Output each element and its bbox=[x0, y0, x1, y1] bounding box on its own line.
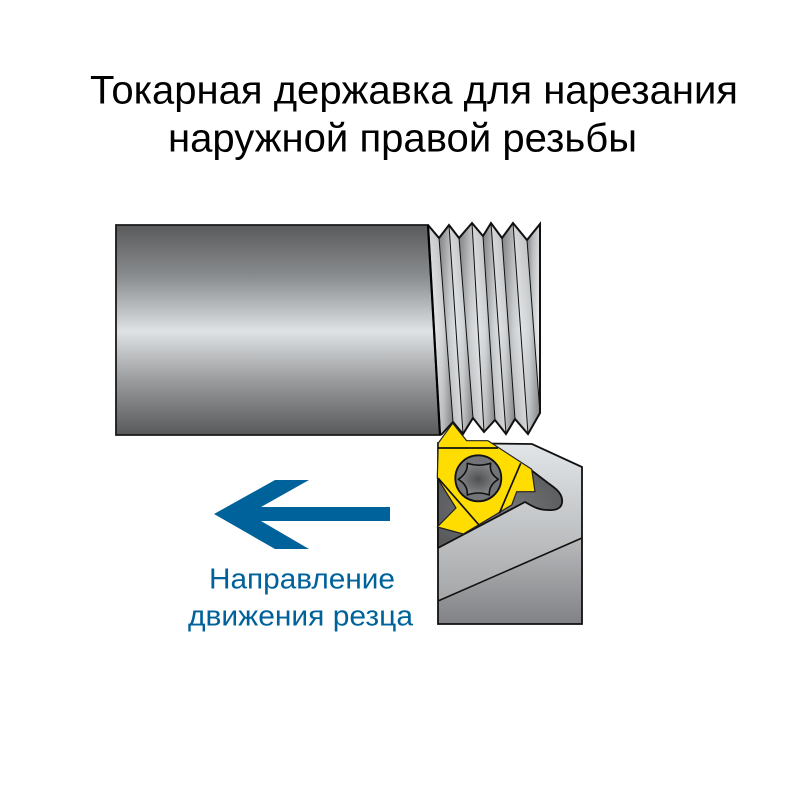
holder lower line bbox=[438, 538, 582, 601]
thread root lines bbox=[439, 223, 540, 434]
torx socket bbox=[458, 463, 498, 495]
holder upper body bbox=[438, 443, 582, 601]
direction label: Направление bbox=[209, 564, 395, 596]
cylinder shank bbox=[116, 225, 440, 435]
title: Токарная державка для нарезания bbox=[90, 68, 738, 112]
title bbox=[90, 68, 738, 160]
thread flanks bbox=[428, 223, 540, 435]
insert edge lines bbox=[438, 448, 521, 525]
holder lower body bbox=[438, 538, 582, 624]
threading insert bbox=[437, 423, 535, 534]
direction arrow bbox=[214, 480, 390, 549]
shank thread edge bbox=[428, 225, 440, 435]
threaded workpiece bbox=[428, 223, 540, 435]
screw bbox=[455, 455, 501, 501]
title: наружной правой резьбы bbox=[168, 116, 637, 160]
direction label bbox=[188, 564, 414, 632]
thread outline bbox=[428, 223, 540, 435]
tool holder bbox=[437, 423, 582, 624]
holder outline bbox=[438, 443, 582, 624]
direction label: движения резца bbox=[188, 600, 414, 632]
insert pocket bbox=[438, 470, 562, 548]
